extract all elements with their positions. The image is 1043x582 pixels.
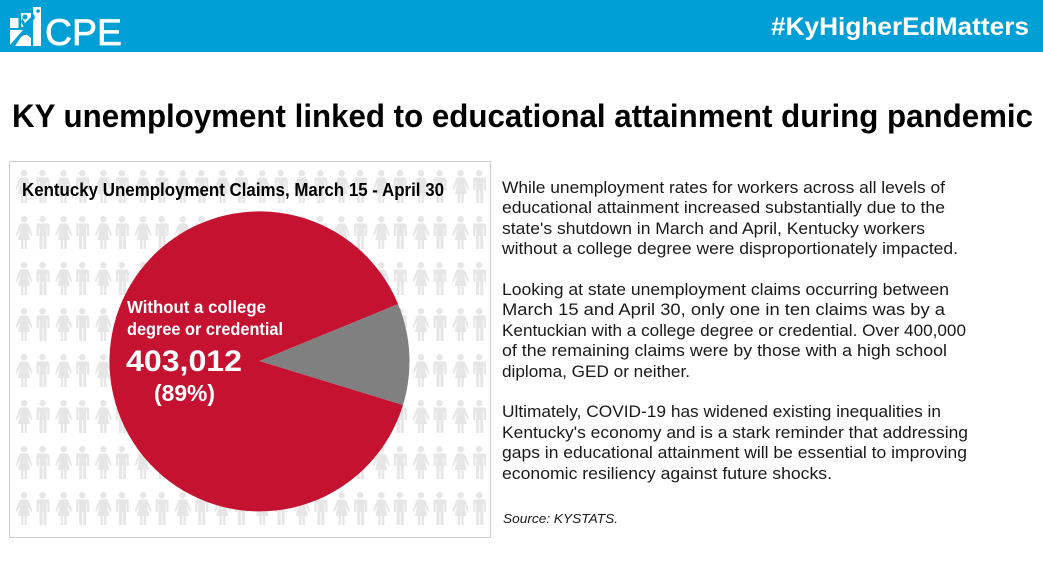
panel background	[10, 162, 490, 538]
panel: pie chart	[10, 162, 490, 538]
paragraph 2: Kentuckian with a college degree or credential. Over 400,000	[502, 322, 966, 340]
paragraph 2: of the remaining claims were by those with a high school	[502, 342, 947, 360]
paragraph 1: state's shutdown in March and April, Kentucky workers	[502, 220, 925, 238]
pie label: Without a college	[127, 297, 266, 317]
paragraph 2	[502, 281, 966, 381]
chart heading: Kentucky Unemployment Claims, March 15 - April 30	[22, 180, 444, 200]
slice: without a degree	[109, 211, 403, 511]
hashtag: #KyHigherEdMatters	[771, 13, 1029, 41]
paragraph 1	[501, 179, 958, 258]
paragraph 2: March 15 and April 30, only one in ten claims was by a	[502, 301, 946, 319]
paragraph 3: Ultimately, COVID-19 has widened existing inequalities in	[502, 403, 941, 421]
source note: Source: KYSTATS.	[503, 511, 618, 526]
pie label: 403,012	[126, 345, 242, 378]
paragraph 1: While unemployment rates for workers across all levels of	[502, 179, 945, 197]
paragraph 3: gaps in educational attainment will be essential to improving	[502, 444, 967, 462]
body text	[501, 179, 968, 483]
icon: logo mark	[10, 7, 41, 46]
title: KY unemployment linked to educational attainment during pandemic	[12, 98, 1033, 134]
pie label: (89%)	[154, 380, 215, 406]
paragraph 1: educational attainment increased substantially due to the	[502, 199, 945, 217]
paragraph 2: diploma, GED or neither.	[502, 363, 690, 381]
pie label	[126, 297, 283, 406]
pie chart	[109, 211, 409, 511]
paragraph 1: without a college degree were disproportionately impacted.	[501, 240, 958, 258]
paragraph 3	[502, 403, 968, 483]
paragraph 2: Looking at state unemployment claims occurring between	[502, 281, 949, 299]
paragraph 3: Kentucky's economy and is a stark reminder that addressing	[502, 424, 968, 442]
header bar	[0, 0, 1043, 52]
CPE logo	[10, 7, 122, 53]
paragraph 3: economic resiliency against future shocks.	[502, 465, 832, 483]
pie label: degree or credential	[127, 319, 283, 339]
slice: with a degree	[260, 304, 409, 405]
people pattern	[14, 168, 486, 534]
logo wordmark: CPE	[45, 11, 122, 53]
